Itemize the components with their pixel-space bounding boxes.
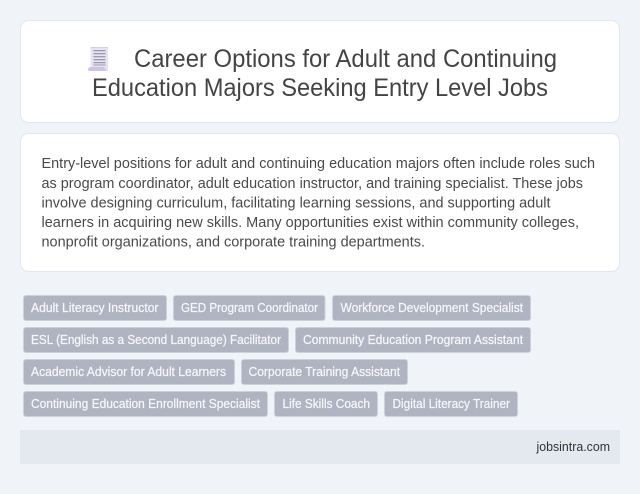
tag: [384, 392, 518, 416]
tag: Academic Advisor for Adult Learners: [31, 365, 226, 379]
footer bar: [20, 430, 620, 464]
tag: [274, 392, 378, 416]
tag: [332, 296, 530, 320]
title: Career Options for Adult and Continuing: [134, 45, 557, 73]
tag: [24, 360, 234, 384]
panel: job tags: [24, 296, 530, 416]
tag: Adult Literacy Instructor: [31, 301, 158, 315]
tag: GED Program Coordinator: [181, 301, 318, 315]
panel: description card: [20, 134, 620, 272]
title: [92, 45, 557, 102]
description text: nonprofit organizations, and corporate training departments.: [42, 234, 425, 250]
description text: as program coordinator, adult education instructor, and training specialist. These jobs: [42, 176, 583, 192]
tag: [24, 392, 268, 416]
tag: [174, 296, 325, 320]
tag: Continuing Education Enrollment Specialist: [31, 397, 260, 411]
tag: ESL (English as a Second Language) Facilitator: [31, 333, 281, 347]
description text: learners in acquiring new skills. Many opportunities exist within community colleges,: [42, 215, 579, 231]
tag: [24, 296, 166, 320]
description text: [42, 156, 595, 250]
description text: involve designing curriculum, facilitating learning sessions, and supporting adult: [42, 196, 550, 212]
tag: Workforce Development Specialist: [340, 301, 523, 315]
tag: [296, 328, 530, 352]
description text: Entry-level positions for adult and continuing education majors often include roles such: [42, 156, 595, 172]
tag: Community Education Program Assistant: [303, 333, 523, 347]
title: Education Majors Seeking Entry Level Jobs: [92, 74, 548, 102]
tag: Corporate Training Assistant: [248, 365, 400, 379]
tag: [242, 360, 408, 384]
icon: document scroll: [88, 47, 108, 71]
tag: [24, 328, 288, 352]
tag: Digital Literacy Trainer: [392, 397, 510, 411]
footer source text: jobsintra.com: [536, 439, 610, 454]
panel: title card: [20, 20, 620, 122]
tag: Life Skills Coach: [282, 397, 370, 411]
